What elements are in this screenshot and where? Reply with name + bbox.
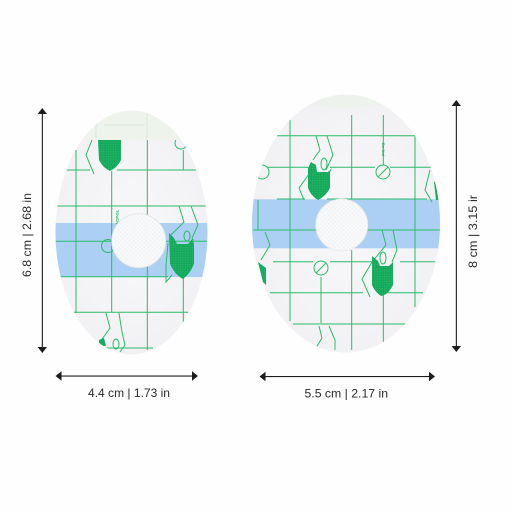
height arrow: small dressing [38, 108, 47, 353]
height label: small dressing: 6.8 cm | 2.68 in [20, 193, 34, 277]
blue band [245, 199, 445, 248]
small oval dressing [56, 110, 208, 354]
large oval dressing [252, 94, 440, 352]
green grid [253, 115, 440, 350]
width label: small dressing: 4.4 cm | 1.73 in [88, 386, 170, 400]
hand outlines [299, 136, 333, 200]
white absorbent pad [316, 199, 368, 251]
green grip tabs [98, 140, 121, 171]
hand outlines [86, 140, 125, 352]
faded top liner [310, 94, 380, 110]
white absorbent pad [112, 214, 166, 268]
blue band [50, 223, 215, 277]
small print text: Do Not [381, 143, 386, 157]
small print text: TOUCH [115, 210, 120, 224]
height arrow: large dressing [452, 100, 461, 352]
height label: large dressing: 8 cm | 3.15 ir [466, 195, 480, 268]
width label: large dressing: 5.5 cm | 2.17 in [304, 386, 388, 400]
width arrow: small dressing [56, 371, 198, 381]
width arrow: large dressing [260, 372, 435, 381]
faded top liner [83, 110, 180, 140]
green grid [55, 137, 207, 352]
green grip tabs [308, 162, 332, 200]
